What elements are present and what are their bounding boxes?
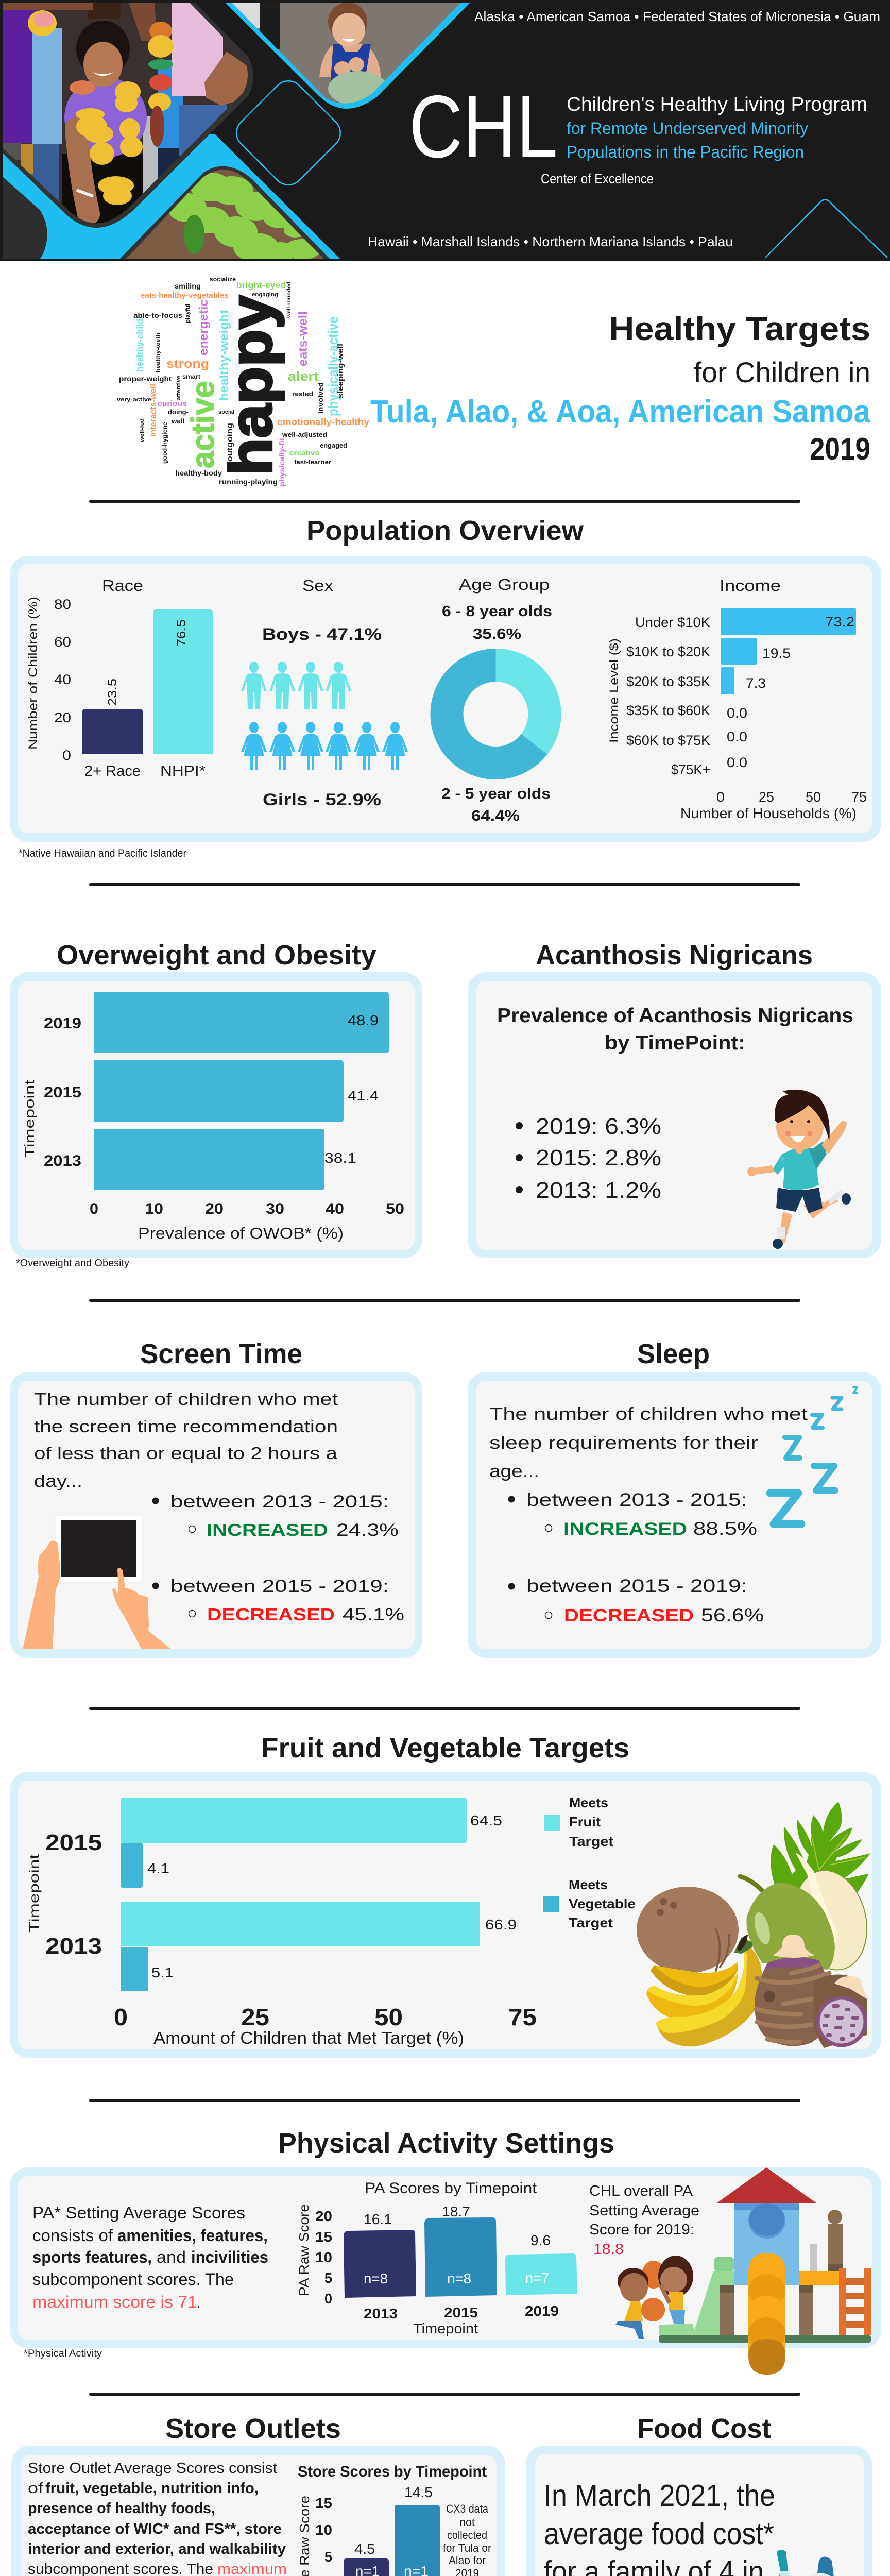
- bar chart: PA scores: 2019: [525, 2303, 559, 2319]
- panel: overweight and obesity chart: 2019: [44, 1015, 81, 1032]
- chart: income: 0.0: [727, 729, 747, 744]
- chart: income: $20K to $35K: [626, 674, 710, 689]
- panel: physical activity settings: [10, 2167, 881, 2375]
- word cloud: eats-well: [296, 311, 310, 366]
- heading: screen time: Screen Time: [140, 1338, 302, 1369]
- program name: Populations in the Pacific Region: [567, 143, 804, 161]
- chart: income: 25: [759, 789, 774, 805]
- panel: food cost: [526, 2446, 883, 2576]
- change: 2013 to 2015: [508, 1490, 757, 1539]
- icon: playground: [615, 2167, 871, 2375]
- legend: Fruit: [569, 1814, 601, 1829]
- panel: overweight and obesity chart: 41.4: [348, 1088, 379, 1104]
- callout: overall PA score: 18.8: [593, 2241, 624, 2258]
- text block: store description: [28, 2460, 287, 2576]
- chart: race: 20: [54, 710, 71, 725]
- prevalence list: 2013: 1.2%: [536, 1178, 661, 1203]
- panel: overweight and obesity chart: Timepoint: [22, 1079, 37, 1158]
- word cloud: creative: [289, 449, 319, 457]
- panel: screen time: the screen time recommendation: [34, 1417, 338, 1436]
- chart: income: [607, 577, 867, 821]
- word cloud: rested: [292, 390, 313, 398]
- panel: food cost: In March 2021, the: [544, 2479, 775, 2513]
- text block: store description: interior and exterior, and walkability: [28, 2541, 286, 2557]
- bar chart: PA scores: 9.6: [530, 2232, 551, 2248]
- prevalence list: [516, 1114, 661, 1203]
- change: 2015 to 2019: DECREASED: [207, 1605, 335, 1624]
- word cloud: active: [185, 381, 221, 468]
- bar chart: PA scores: PA Scores by Timepoint: [365, 2180, 537, 2197]
- word cloud: healthy-body: [175, 469, 222, 477]
- word cloud: running-playing: [219, 478, 278, 486]
- chart: age group donut: Age Group: [459, 575, 550, 594]
- bar chart: store scores: collected: [447, 2529, 487, 2541]
- bar chart: PA scores: 20: [315, 2208, 332, 2224]
- word cloud: alert: [288, 368, 319, 384]
- chart: income: $35K to $60K: [626, 703, 710, 718]
- bar chart: PA scores: 18.7: [442, 2204, 470, 2219]
- text block: store description: Store Outlet Average Scores consist: [28, 2460, 277, 2477]
- panel: overweight and obesity chart: 2013: [44, 1153, 81, 1170]
- legend: Vegetable: [569, 1896, 636, 1911]
- chart: race: Number of Children (%): [26, 597, 40, 750]
- text block: PA description: subcomponent scores. The: [32, 2270, 234, 2289]
- text block: PA description: .: [197, 2293, 200, 2311]
- chart: race: 40: [54, 672, 71, 687]
- legend: Meets: [569, 1877, 608, 1892]
- change: 2015 to 2019: 56.6%: [701, 1605, 764, 1625]
- sex breakdown: Girls - 52.9%: [263, 790, 381, 809]
- bar chart: 66.9: [485, 1917, 517, 1933]
- word cloud: proper-weight: [119, 375, 172, 383]
- word cloud: involved: [317, 382, 324, 414]
- heading: food cost: Food Cost: [637, 2413, 771, 2444]
- change: 2015 to 2019: [152, 1577, 404, 1624]
- chart: race: Race: [102, 577, 143, 595]
- chart: income: 19.5: [762, 646, 791, 661]
- prevalence list: 2015: 2.8%: [536, 1145, 661, 1171]
- change: 2015 to 2019: 45.1%: [343, 1605, 404, 1624]
- chart: race: 23.5: [106, 679, 119, 706]
- panel: screen time: day...: [34, 1471, 82, 1490]
- chart: income: 50: [806, 789, 821, 805]
- change: 2013 to 2015: between 2013 - 2015:: [526, 1490, 747, 1510]
- decorative outline diamond: [230, 75, 347, 191]
- change: 2015 to 2019: [508, 1576, 764, 1625]
- bar chart: store scores: Alao for: [449, 2554, 486, 2567]
- panel: overweight and obesity chart: 20: [205, 1200, 224, 1217]
- change: 2013 to 2015: 88.5%: [693, 1519, 757, 1539]
- bar chart: PA scores: 16.1: [364, 2211, 392, 2227]
- word cloud: engaged: [320, 442, 347, 449]
- change: 2015 to 2019: DECREASED: [564, 1606, 694, 1625]
- header region names: Alaska • American Samoa • Federated States of Micronesia • Guam: [474, 9, 880, 24]
- bar chart: store scores: not: [459, 2516, 475, 2529]
- program name: for Remote Underserved Minority: [567, 119, 808, 138]
- icon: running boy: [747, 1090, 851, 1249]
- text block: PA description: consists of: [32, 2226, 113, 2245]
- prevalence list: 2019: 6.3%: [536, 1114, 661, 1139]
- word cloud: outgoing: [226, 423, 234, 462]
- panel: acanthosis nigricans: Prevalence of Acanthosis Nigricans: [497, 1005, 853, 1027]
- bar chart: 2013: [45, 1934, 102, 1959]
- word cloud: interacts-well: [148, 384, 158, 437]
- bar chart: PA scores: 0: [324, 2291, 332, 2307]
- legend: Target: [569, 1915, 613, 1930]
- footnote: *Physical Activity: [24, 2348, 102, 2359]
- bar chart: store scores: CX3 data: [446, 2502, 489, 2515]
- bar chart: PA scores: 2015: [444, 2304, 478, 2320]
- word cloud: healthy-weight: [217, 310, 231, 401]
- bar chart: store scores: Store Scores by Timepoint: [298, 2463, 487, 2480]
- chart: race: 0: [62, 748, 71, 763]
- word cloud: physically-fit: [278, 438, 286, 486]
- bar chart: PA scores: 5: [324, 2270, 332, 2286]
- text block: store description: acceptance of WIC* and FS**, store: [28, 2521, 282, 2537]
- sex breakdown: Boys - 47.1%: [262, 625, 382, 643]
- text block: store description: fruit, vegetable, nutrition info,: [45, 2480, 259, 2497]
- word cloud: bright-eyed: [236, 280, 286, 290]
- bar chart: store scores: 5: [324, 2549, 332, 2565]
- bar chart: Timepoint: [26, 1854, 42, 1933]
- callout: overall PA score: Score for 2019:: [589, 2222, 694, 2238]
- heading: sleep: Sleep: [637, 1338, 710, 1369]
- title: 2019: [810, 432, 870, 466]
- chart: income: Number of Households (%): [680, 805, 857, 821]
- word cloud: healthy-teeth: [155, 333, 161, 372]
- panel: overweight and obesity chart: Prevalence of OWOB* (%): [138, 1224, 344, 1242]
- legend: Target: [569, 1834, 613, 1849]
- word cloud: emotionally-healthy: [277, 417, 369, 427]
- word cloud: well-fed: [139, 418, 145, 443]
- chart: income: Income Level ($): [607, 638, 621, 743]
- chart: income: $10K to $20K: [626, 644, 710, 659]
- word cloud: playful: [185, 304, 191, 323]
- word cloud: good-hygiene: [161, 422, 168, 464]
- text block: PA description: maximum score is 71: [32, 2293, 197, 2311]
- change: 2013 to 2015: INCREASED: [207, 1520, 328, 1539]
- change: 2015 to 2019: between 2015 - 2019:: [526, 1576, 747, 1596]
- text block: PA description: and: [157, 2248, 186, 2266]
- word cloud: physically-active: [325, 316, 341, 416]
- sex breakdown: [241, 577, 408, 809]
- panel: sleep: age...: [489, 1462, 539, 1481]
- program name: Children's Healthy Living Program: [567, 94, 867, 115]
- bar chart: store scores: [297, 2463, 491, 2576]
- panel: acanthosis nigricans: [468, 972, 881, 1258]
- chart: race: 76.5: [175, 619, 189, 647]
- bar chart: PA scores: [296, 2180, 577, 2336]
- panel: screen time: The number of children who met: [34, 1389, 338, 1409]
- panel: fruit and vegetable targets: [10, 1772, 881, 2058]
- bar chart: PA scores: 15: [315, 2229, 332, 2245]
- panel: overweight and obesity chart: 0: [90, 1200, 98, 1217]
- panel: overweight and obesity chart: [10, 972, 422, 1258]
- icon: sleeping Zs: [770, 1387, 857, 1524]
- CHL wordmark: CHL: [409, 77, 558, 176]
- callout: overall PA score: CHL overall PA: [589, 2183, 693, 2199]
- chart: race: 2+ Race: [84, 763, 141, 779]
- word cloud: energetic: [197, 299, 211, 355]
- callout: overall PA score: Setting Average: [589, 2202, 699, 2219]
- bar chart: store scores: 15: [315, 2495, 332, 2511]
- word cloud: happy: [217, 295, 284, 476]
- footnote: *Overweight and Obesity: [16, 1258, 129, 1269]
- word cloud: smart: [182, 373, 200, 380]
- bar chart: store scores: 10: [315, 2522, 332, 2538]
- panel: overweight and obesity chart: 38.1: [324, 1150, 356, 1166]
- word cloud: able-to-focus: [133, 311, 182, 319]
- chart: age group donut: 35.6%: [473, 626, 521, 642]
- chart: income: 75: [851, 789, 867, 805]
- panel: food cost: average food cost*: [544, 2517, 774, 2551]
- bar chart: store scores: 14.5: [404, 2484, 433, 2500]
- heading: store outlets: Store Outlets: [165, 2413, 341, 2444]
- icon: children with basketballs: [615, 2256, 693, 2339]
- word cloud: socialize: [210, 276, 236, 283]
- chart: income: $60K to $75K: [626, 733, 710, 748]
- text block: PA description: PA* Setting Average Scores: [32, 2204, 245, 2222]
- heading: acanthosis nigricans: Acanthosis Nigricans: [536, 940, 813, 971]
- panel: overweight and obesity chart: 48.9: [348, 1012, 379, 1028]
- title: Tula, Alao, & Aoa, American Samoa: [370, 394, 870, 430]
- word cloud: curious: [158, 399, 187, 408]
- text block: PA description: [32, 2204, 268, 2311]
- legend: [543, 1795, 636, 1930]
- word cloud: attentive: [176, 376, 182, 400]
- panel: overweight and obesity chart: 2015: [44, 1084, 81, 1101]
- chart: income: Under $10K: [635, 615, 710, 630]
- bar chart: 50: [374, 2004, 403, 2030]
- word cloud: well-rounded: [286, 282, 292, 318]
- word cloud: healthy-child: [135, 319, 145, 372]
- chart: race: 60: [54, 634, 71, 650]
- word cloud: strong: [166, 357, 209, 371]
- bar chart: store scores: for Tula or: [443, 2541, 491, 2554]
- bar chart: 5.1: [151, 1964, 174, 1980]
- panel: screen time: [10, 1372, 422, 1658]
- panel: sleep: [468, 1372, 881, 1658]
- title: Healthy Targets: [609, 310, 870, 347]
- bar chart: 64.5: [470, 1812, 502, 1828]
- chart: age group donut: 6 - 8 year olds: [442, 603, 552, 620]
- word cloud: well-adjusted: [282, 431, 327, 438]
- panel: store outlets: [11, 2446, 505, 2576]
- chart: income: 73.2: [825, 614, 854, 630]
- header banner: [0, 0, 890, 263]
- panel: overweight and obesity chart: 30: [266, 1200, 284, 1217]
- title: [370, 310, 870, 466]
- change: 2013 to 2015: INCREASED: [563, 1519, 687, 1539]
- bar chart: PA scores: Timepoint: [413, 2320, 478, 2336]
- text block: PA description: sports features,: [32, 2248, 152, 2266]
- panel: sleep: sleep requirements for their: [489, 1433, 758, 1453]
- text block: store description: presence of healthy foods,: [28, 2500, 215, 2517]
- chart: race: 80: [54, 597, 71, 612]
- bar chart: [26, 1798, 537, 2047]
- word cloud: sleeping-well: [336, 344, 345, 398]
- bar chart: PA scores: n=7: [525, 2270, 549, 2286]
- panel: overweight and obesity chart: 40: [326, 1200, 344, 1217]
- icon: tropical fruit and vegetables: [637, 1802, 877, 2048]
- bar chart: PA scores: n=8: [447, 2270, 471, 2286]
- change: 2013 to 2015: 24.3%: [336, 1520, 399, 1540]
- bar chart: PA scores: 2013: [364, 2306, 398, 2321]
- change: 2015 to 2019: between 2015 - 2019:: [170, 1577, 389, 1596]
- bar chart: store scores: 4.5: [354, 2541, 375, 2557]
- footnote: *Native Hawaiian and Pacific Islander: [19, 848, 186, 859]
- bar chart: Amount of Children that Met Target (%): [153, 2028, 464, 2047]
- bar chart: PA scores: n=8: [364, 2270, 388, 2286]
- program name: Center of Excellence: [541, 171, 654, 187]
- text block: PA description: amenities, features,: [117, 2226, 268, 2245]
- chart: age group donut: [441, 575, 561, 824]
- legend: Meets: [569, 1795, 608, 1810]
- word cloud: engaging: [252, 292, 278, 298]
- icon: boys: [241, 662, 351, 709]
- sex breakdown: Sex: [302, 577, 334, 595]
- word cloud: smiling: [175, 282, 201, 290]
- word cloud: doing-: [168, 408, 189, 416]
- icon: hands and tablet: [23, 1515, 171, 1649]
- bar chart: PA scores: 10: [315, 2249, 332, 2265]
- word cloud: eats-healthy-vegetables: [141, 291, 229, 300]
- heading: overweight and obesity: Overweight and Obesity: [57, 940, 376, 971]
- panel: overweight and obesity chart: 50: [386, 1200, 404, 1217]
- change: 2013 to 2015: [152, 1492, 399, 1540]
- bar chart: 2015: [45, 1830, 102, 1855]
- bar chart: PA scores: PA Raw Score: [296, 2204, 312, 2296]
- header region names bottom: Hawaii • Marshall Islands • Northern Mariana Islands • Palau: [368, 234, 733, 249]
- icon: girls: [241, 722, 408, 770]
- chart: income: 0: [716, 789, 725, 805]
- change: 2013 to 2015: between 2013 - 2015:: [170, 1492, 389, 1512]
- heading: fruit and vegetable targets: Fruit and Vegetable Targets: [261, 1733, 629, 1764]
- photo: lettuce garden: [120, 166, 330, 263]
- panel: overweight and obesity chart: 10: [145, 1200, 163, 1217]
- word cloud: social: [218, 409, 234, 415]
- chart: income: 7.3: [746, 675, 766, 691]
- panel: screen time: of less than or equal to 2 hours a: [34, 1444, 338, 1463]
- word cloud: well: [171, 417, 184, 425]
- callout: overall PA score: [589, 2183, 699, 2258]
- photo: children with leis: [0, 0, 258, 242]
- panel: acanthosis nigricans: by TimePoint:: [605, 1032, 745, 1054]
- chart: income: 0.0: [727, 755, 747, 770]
- text block: store description: of: [28, 2480, 44, 2497]
- word cloud: [117, 276, 369, 486]
- bar chart: 25: [241, 2004, 269, 2030]
- panel: sleep: The number of children who met: [489, 1404, 808, 1424]
- chart: race: [26, 577, 213, 779]
- chart: age group donut: 2 - 5 year olds: [441, 786, 551, 802]
- chart: income: $75K+: [671, 762, 710, 777]
- bar chart: 75: [508, 2004, 537, 2030]
- word cloud: fast-learner: [294, 459, 331, 466]
- chart: race: NHPI*: [160, 763, 206, 779]
- chart: income: Income: [720, 577, 781, 595]
- text block: PA description: incivilities: [191, 2248, 268, 2266]
- bar chart: 0: [114, 2004, 128, 2030]
- icon: grocery bag: [742, 2550, 883, 2576]
- program name: [541, 94, 867, 187]
- photo: child with bag of greens: [225, 0, 470, 113]
- chart: age group donut: 64.4%: [471, 808, 520, 824]
- panel: population overview: [10, 556, 881, 842]
- bar chart: 4.1: [147, 1860, 169, 1876]
- word cloud: very-active: [117, 397, 151, 403]
- title: for Children in: [694, 356, 870, 388]
- chart: income: 0.0: [727, 705, 747, 721]
- heading: physical activity settings: Physical Activity Settings: [278, 2128, 614, 2159]
- heading: population overview: Population Overview: [306, 515, 584, 546]
